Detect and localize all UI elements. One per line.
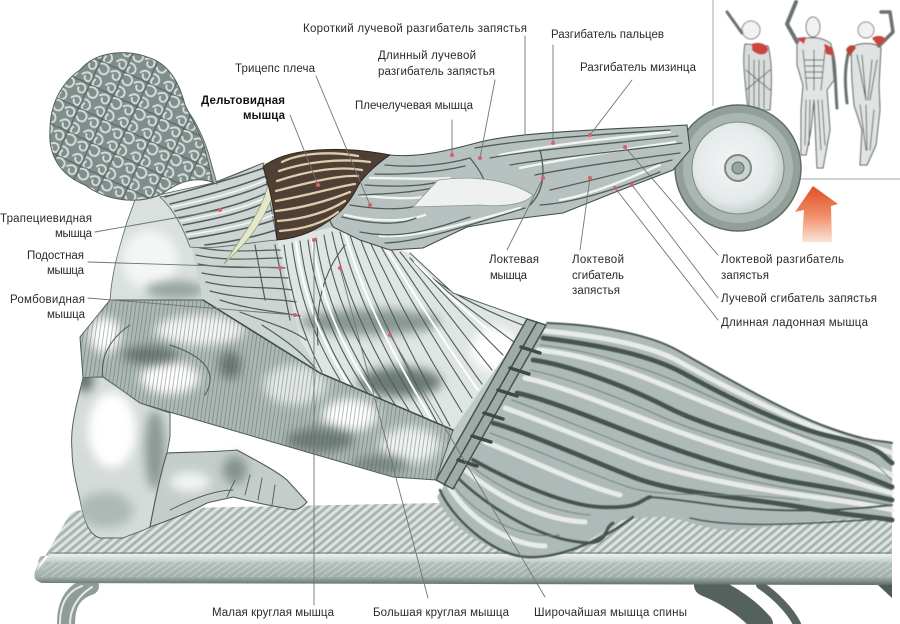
- bench top surface: [34, 503, 892, 575]
- label: flexor carpi radialis: Лучевой сгибатель запястья: [721, 293, 877, 305]
- label: infraspinatus: Подостная: [27, 250, 84, 262]
- label: deltoid: Дельтовидная: [201, 95, 285, 107]
- label: infraspinatus: мышца: [47, 265, 85, 277]
- bent upper arm: [72, 368, 170, 538]
- label: extensor carpi ulnaris: Локтевой разгибатель: [721, 254, 844, 266]
- rear shoulder and neck base: [110, 163, 277, 300]
- supporting forearm and hand: [150, 450, 307, 527]
- leader lines: [88, 36, 718, 605]
- waistband: [436, 319, 546, 489]
- label: teres major: Большая круглая мышца: [373, 607, 510, 619]
- label: short radial extensor: Короткий лучевой разгибатель запястья: [303, 23, 527, 35]
- label: brachioradialis: Плечелучевая мышца: [355, 100, 474, 112]
- trapezius muscle: [160, 163, 278, 264]
- curly hair head: [50, 53, 213, 200]
- label: little finger extensor: Разгибатель мизинца: [580, 62, 697, 74]
- bench: [34, 503, 892, 624]
- body: [50, 53, 892, 557]
- label: long radial extensor: разгибатель запястья: [378, 66, 495, 78]
- label: trapezius: Трапециевидная: [0, 213, 92, 225]
- label: triceps: Трицепс плеча: [235, 63, 316, 75]
- label: rhomboid: Ромбовидная: [10, 294, 85, 306]
- figure two: front view: [787, 2, 837, 168]
- lower torso: [80, 300, 453, 480]
- legs with striped trousers: [437, 323, 892, 557]
- muscle marker dots: [218, 133, 634, 337]
- deltoid muscle highlighted: [263, 149, 390, 240]
- label: deltoid: мышца: [243, 110, 286, 122]
- label: long radial extensor: Длинный лучевой: [378, 50, 476, 62]
- label: latissimus dorsi: Широчайшая мышца спины: [534, 607, 687, 619]
- figure one: side view: [727, 12, 771, 110]
- lower torso shading: [81, 300, 450, 480]
- inset: three anatomical figures: [727, 2, 893, 168]
- triceps tendon highlight: [413, 178, 533, 207]
- inset frame lines: [713, 0, 900, 179]
- label: trapezius: мышца: [55, 228, 93, 240]
- label: palmaris longus: Длинная ладонная мышца: [721, 317, 869, 329]
- beard and face edge: [180, 105, 217, 184]
- barbell plate: [675, 105, 801, 231]
- latissimus muscle: [277, 227, 530, 430]
- bench legs: [60, 585, 892, 624]
- label: teres minor: Малая круглая мышца: [212, 607, 335, 619]
- label: rhomboid: мышца: [47, 309, 86, 321]
- infraspinatus and rhomboid muscles: [190, 240, 453, 430]
- upper arm and forearm: [320, 125, 690, 250]
- label: anconeus: мышца: [490, 270, 528, 282]
- label: extensor carpi ulnaris: запястья: [721, 270, 769, 282]
- figure three: rear view: [845, 12, 893, 165]
- label: flexor carpi ulnaris: Локтевой: [572, 254, 624, 266]
- label: flexor carpi ulnaris: сгибатель: [572, 270, 624, 282]
- body underlay: [80, 155, 530, 480]
- bench front face: [34, 554, 892, 585]
- red arrow: [795, 186, 838, 242]
- label: flexor carpi ulnaris: запястья: [572, 285, 620, 297]
- label: finger extensor: Разгибатель пальцев: [551, 29, 664, 41]
- label: anconeus: Локтевая: [489, 254, 539, 266]
